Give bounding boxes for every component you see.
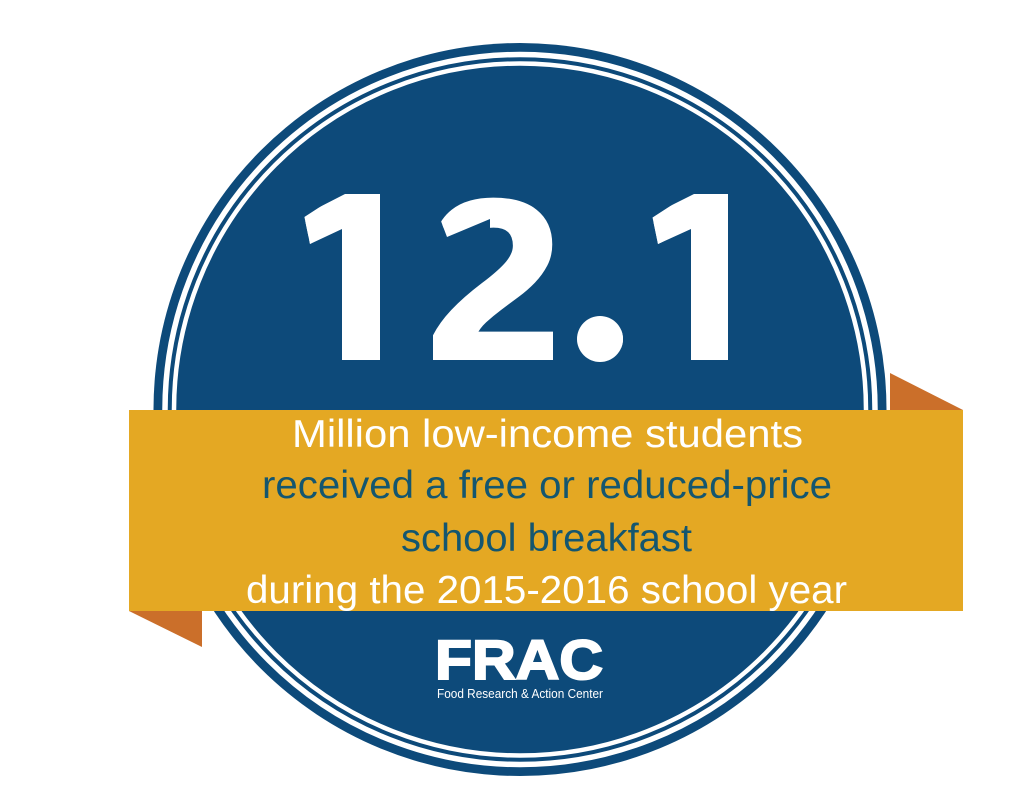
badge: blue circle with double white ring xyxy=(154,43,886,776)
decimal point: . xyxy=(552,57,646,437)
line 2: received a free or reduced-price xyxy=(262,464,832,507)
line 3: school breakfast xyxy=(401,517,692,560)
ribbon fold: left xyxy=(129,611,202,647)
logo wordmark: FRAC xyxy=(435,628,603,691)
line 1: Million low-income students xyxy=(292,413,803,456)
big number xyxy=(304,194,728,362)
logo tagline: Food Research & Action Center xyxy=(437,686,604,701)
FRAC logo xyxy=(435,628,604,701)
digit 2: 2 xyxy=(426,153,562,409)
ribbon band xyxy=(129,410,963,611)
line 4: during the 2015-2016 school year xyxy=(246,569,847,612)
infographic xyxy=(129,43,963,776)
ribbon fold: right xyxy=(890,373,963,410)
digit 1: 1 xyxy=(288,143,421,411)
digit 1: 1 xyxy=(637,143,770,411)
ribbon text xyxy=(246,413,847,612)
